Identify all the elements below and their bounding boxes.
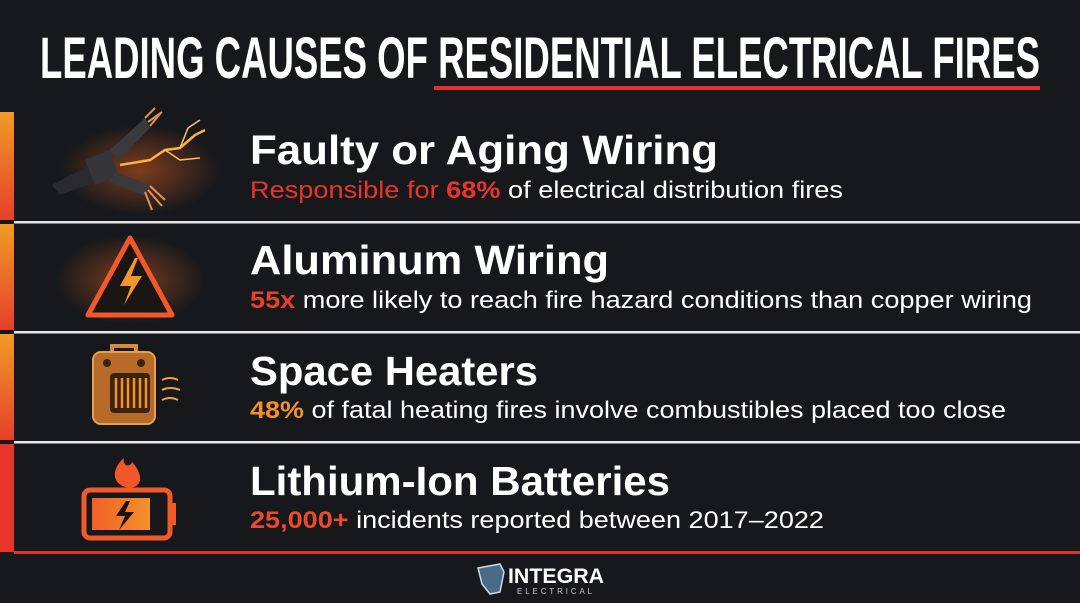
row 2 text: 55x more likely to reach fire hazard conditions than copper wiring (250, 287, 1032, 314)
row 4 text: 25,000+ incidents reported between 2017–2022 (250, 507, 824, 534)
row 4 text: Lithium-Ion Batteries (250, 458, 670, 504)
logo: INTEGRA (508, 565, 604, 588)
row 1 text (250, 127, 843, 204)
icon: battery with flame (84, 458, 176, 538)
row 2 text (250, 237, 1032, 314)
row 1 text: Responsible for 68% of electrical distribution fires (250, 177, 843, 204)
logo (478, 564, 604, 596)
left accent bars (0, 112, 14, 552)
icon: frayed wire with sparks (52, 108, 220, 215)
icon: warning triangle (55, 235, 205, 325)
row 2 text: Aluminum Wiring (250, 237, 609, 283)
row 3 text: Space Heaters (250, 348, 538, 394)
icon: space heater (93, 346, 180, 424)
row 3 text: 48% of fatal heating fires involve combustibles placed too close (250, 397, 1006, 424)
row 4 text (250, 458, 824, 534)
row 1 text: Faulty or Aging Wiring (250, 127, 718, 173)
logo: ELECTRICAL (517, 587, 595, 596)
row 3 text (250, 348, 1006, 424)
